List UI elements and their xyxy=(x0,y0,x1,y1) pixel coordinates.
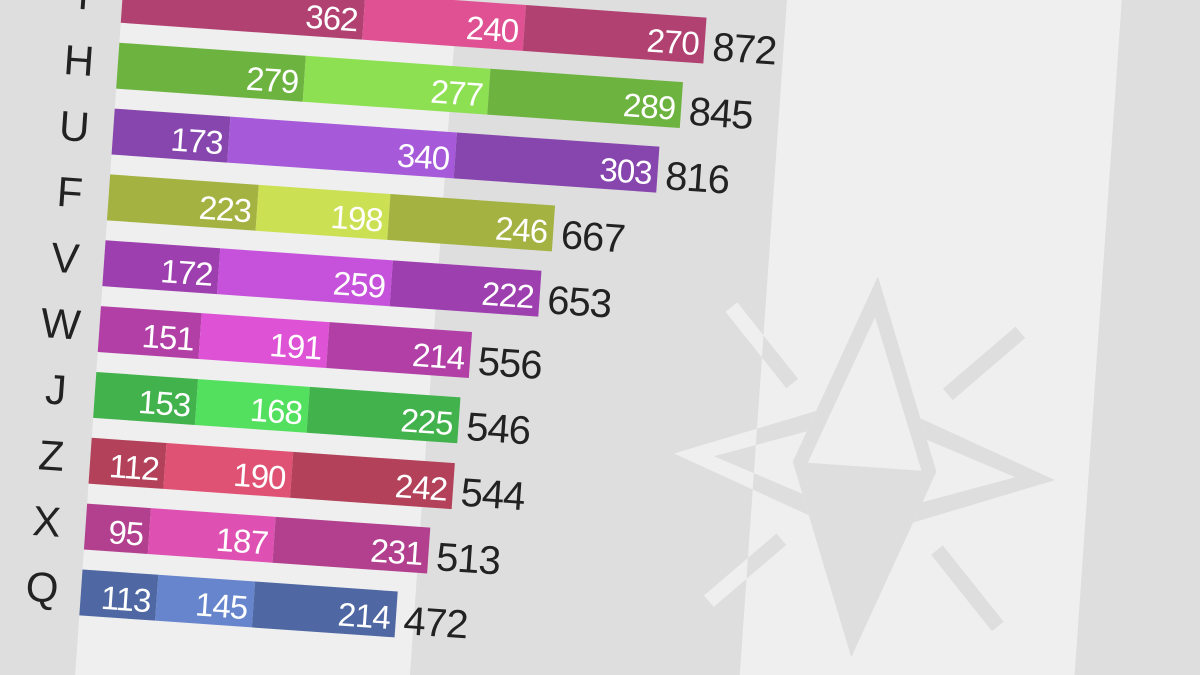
bar row: F: 198 xyxy=(329,198,384,239)
bar row: Q: Q xyxy=(24,563,60,612)
icon: compass star xyxy=(675,278,1054,656)
bar row: I: 872 xyxy=(711,25,778,74)
bar row: V: 222 xyxy=(480,275,535,315)
bar row: U: U xyxy=(58,102,91,151)
bar row: H: 845 xyxy=(687,90,754,138)
bar row: W: 151 xyxy=(141,317,195,358)
bar row: X: X xyxy=(31,497,62,546)
bar row: Q: 113 xyxy=(100,579,152,619)
bar row: V: 172 xyxy=(159,252,214,293)
bar row: W: 191 xyxy=(268,326,323,367)
bar row: Z: 242 xyxy=(394,467,448,508)
bar row: J: 546 xyxy=(465,405,532,453)
bar row: H: 277 xyxy=(429,73,484,113)
bar row: Z: 112 xyxy=(108,447,160,487)
bar row: F: 223 xyxy=(198,189,252,229)
bar row: F: 667 xyxy=(559,213,626,261)
bar row: W: W xyxy=(39,299,82,349)
bar row: Z xyxy=(37,431,526,519)
bar row: U: 173 xyxy=(169,121,224,161)
bar row: W: 214 xyxy=(411,336,465,377)
bar row: X: 231 xyxy=(369,532,424,572)
bar row: V: V xyxy=(50,234,81,282)
bar row: I: 240 xyxy=(465,9,519,49)
bar row: J: 153 xyxy=(137,383,192,424)
bar row: F: 246 xyxy=(494,209,549,250)
bar row: U xyxy=(58,102,731,203)
bar row: X xyxy=(31,497,501,584)
bar row: V: 653 xyxy=(546,278,613,327)
bar row: I: 270 xyxy=(645,22,700,62)
bar row: X: 95 xyxy=(107,513,144,553)
bar row: Q xyxy=(24,563,469,647)
bar row: F: F xyxy=(55,168,84,217)
bar row: top partial xyxy=(26,0,927,13)
bar row: W xyxy=(39,299,543,388)
bar row: X: 513 xyxy=(435,535,501,584)
bar row: I xyxy=(76,0,778,74)
bar row: Q: 145 xyxy=(194,585,249,626)
bar row: U: 816 xyxy=(664,154,731,203)
bar row: H: 289 xyxy=(622,86,676,127)
bar row: H: 279 xyxy=(245,60,299,100)
bar row: J: 168 xyxy=(249,391,303,431)
bar row: J: 225 xyxy=(399,401,454,442)
bar row: V: 259 xyxy=(332,264,386,305)
bar row: U: 303 xyxy=(598,151,653,191)
bar row: J: J xyxy=(44,366,68,414)
bar row: V xyxy=(50,234,613,327)
bar row: U: 340 xyxy=(396,136,450,177)
bar row: Z: 544 xyxy=(459,471,526,519)
bar row: H xyxy=(62,36,754,138)
bar row: F xyxy=(55,168,626,261)
bar row: J xyxy=(44,366,532,453)
bar row: H: H xyxy=(62,36,96,85)
bar row: Z: 190 xyxy=(232,456,287,496)
bar row: X: 187 xyxy=(215,521,269,561)
bar row: Q: 472 xyxy=(402,599,469,647)
bar row: Z: Z xyxy=(37,431,66,480)
bar row: Q: 214 xyxy=(337,595,391,636)
bar row: W: 556 xyxy=(476,340,543,388)
